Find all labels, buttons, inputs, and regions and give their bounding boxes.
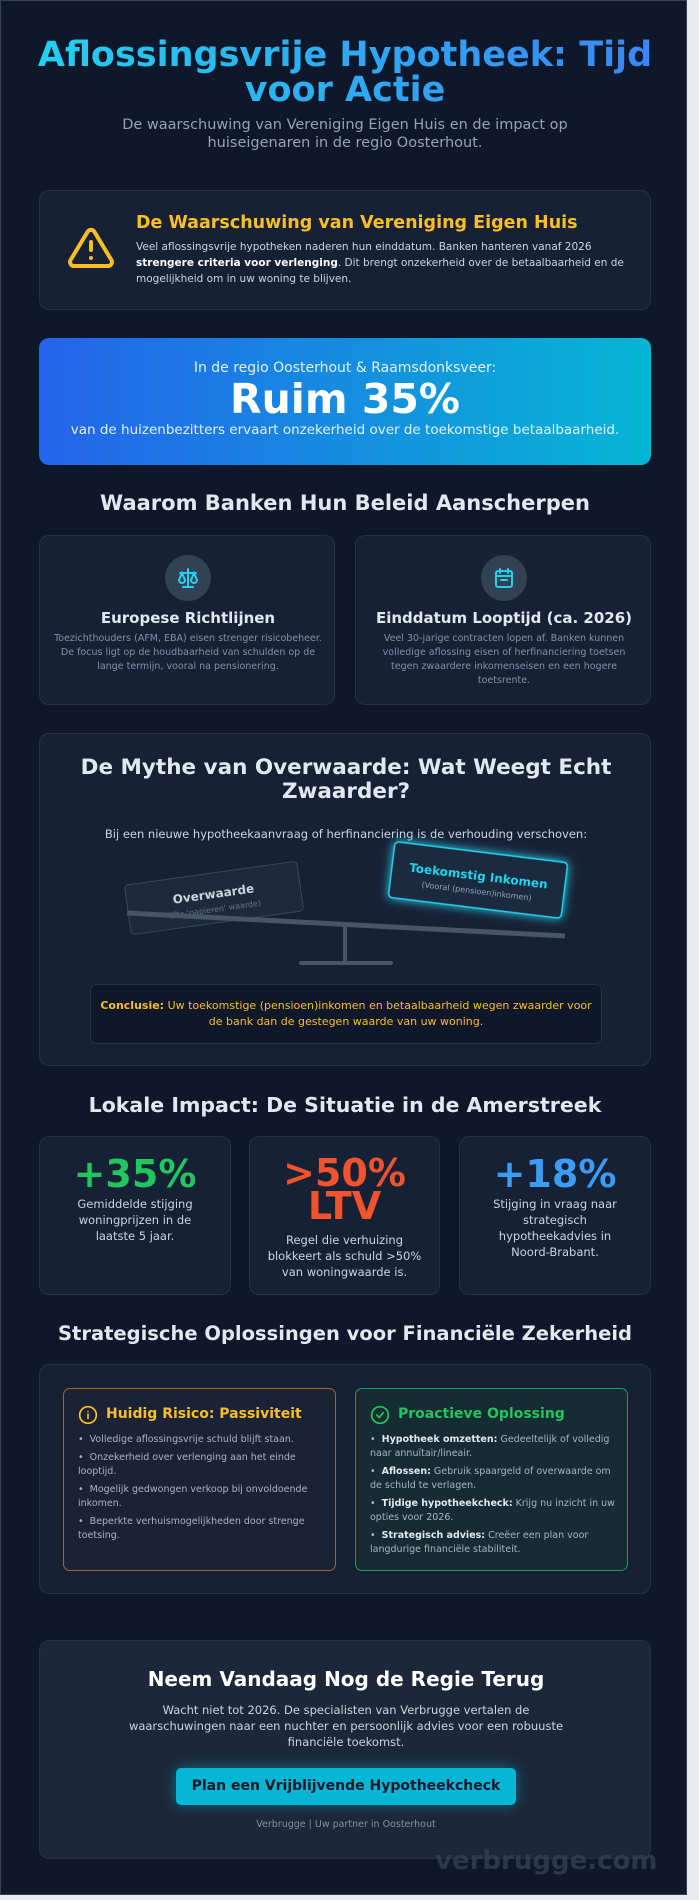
- stat: +35%: [39, 1136, 231, 1295]
- heading: strategische oplossingen: Strategische Oplossingen voor Financiële Zekerheid: [58, 1322, 632, 1345]
- box: huidig risico: • Volledige aflossingsvrije schuld blijft staan.: [78, 1434, 294, 1445]
- banner: 35% stat: [39, 338, 651, 465]
- panel: mythe van overwaarde: [39, 733, 651, 1066]
- icon: warning triangle: [68, 228, 114, 268]
- stat: +18%: Stijging in vraag naar strategisch hypotheekadvies in Noord-Brabant.: [493, 1197, 617, 1259]
- card: einddatum looptijd: Veel 30-jarige contracten lopen af. Banken kunnen volledige aflossing eisen of herfinanciering toetsen tegen zwaardere inkomenseisen en een hogere toetsrente.: [383, 633, 625, 686]
- callout: conclusie: [90, 984, 602, 1044]
- title: Aflossingsvrije Hypotheek: Tijd voor Actie: [38, 35, 652, 110]
- mythe heading: De Mythe van Overwaarde: Wat Weegt Echt Zwaarder?: [81, 755, 611, 804]
- box: proactieve oplossing: • Aflossen: Gebruik spaargeld of overwaarde om de schuld te verlagen.: [370, 1466, 611, 1491]
- warning text: Veel aflossingsvrije hypotheken naderen hun einddatum. Banken hanteren vanaf 2026 strengere criteria voor verlenging. Dit brengt onzekerheid over de betaalbaarheid en de mogelijkheid om in uw woning te blijven.: [136, 241, 624, 285]
- scale diagram: [124, 834, 576, 965]
- banner: 35% stat: Ruim 35%: [230, 375, 460, 423]
- stat: +18%: +18%: [494, 1152, 616, 1196]
- stat: >50% LTV: [249, 1136, 440, 1295]
- panel: call to action: [39, 1640, 651, 1859]
- heading: waarom banken: Waarom Banken Hun Beleid Aanscherpen: [100, 491, 590, 515]
- stat: +35%: +35%: [74, 1152, 196, 1196]
- subtitle: De waarschuwing van Vereniging Eigen Huis en de impact op huiseigenaren in de regio Oosterhout.: [122, 117, 568, 151]
- box: huidig risico: [63, 1388, 336, 1571]
- icon: calendar: [481, 555, 527, 601]
- icon: scales: [165, 555, 211, 601]
- beam: [127, 913, 565, 936]
- card: einddatum looptijd: Einddatum Looptijd (ca. 2026): [376, 609, 632, 627]
- watermark: verbrugge.com: [435, 1846, 657, 1876]
- mythe intro: Bij een nieuwe hypotheekaanvraag of herfinanciering is de verhouding verschoven:: [105, 827, 587, 841]
- button: Plan een Vrijblijvende Hypotheekcheck: [192, 1778, 500, 1794]
- card: einddatum looptijd: [355, 535, 651, 705]
- callout: conclusie: Conclusie: Uw toekomstige (pensioen)inkomen en betaalbaarheid wegen zwaarder voor de bank dan de gestegen waarde van uw woning.: [100, 999, 592, 1028]
- panel: warning: [39, 190, 651, 310]
- button: [176, 1768, 516, 1805]
- box: huidig risico: • Mogelijk gedwongen verkoop bij onvoldoende inkomen.: [78, 1484, 307, 1509]
- box: huidig risico: Huidig Risico: Passiviteit: [106, 1406, 302, 1422]
- panel: call to action: Neem Vandaag Nog de Regie Terug: [148, 1667, 544, 1691]
- icon: check: [370, 1406, 390, 1424]
- box: toekomstig inkomen: Toekomstig Inkomen: [409, 861, 548, 891]
- stat: +18%: [459, 1136, 651, 1295]
- panel: call to action: Verbrugge | Uw partner in Oosterhout: [256, 1819, 436, 1830]
- box: proactieve oplossing: • Strategisch advies: Creëer een plan voor langdurige financiële stabiliteit.: [370, 1530, 588, 1555]
- box: proactieve oplossing: Proactieve Oplossing: [398, 1406, 565, 1422]
- card: europese richtlijnen: Europese Richtlijnen: [101, 609, 275, 627]
- stat: >50% LTV: LTV: [308, 1184, 381, 1228]
- warning heading: De Waarschuwing van Vereniging Eigen Huis: [136, 213, 578, 233]
- box: overwaarde: [124, 861, 304, 935]
- banner: 35% stat: van de huizenbezitters ervaart onzekerheid over de toekomstige betaalbaarheid.: [71, 422, 619, 438]
- box: proactieve oplossing: • Hypotheek omzetten: Gedeeltelijk of volledig naar annuïtair/lineair.: [370, 1434, 609, 1459]
- panel: oplossingen: [39, 1364, 651, 1594]
- box: proactieve oplossing: [355, 1388, 628, 1571]
- stat: >50% LTV: >50%: [283, 1151, 406, 1195]
- stat: +35%: Gemiddelde stijging woningprijzen in de laatste 5 jaar.: [77, 1197, 193, 1243]
- box: toekomstig inkomen: [388, 842, 568, 918]
- stat: >50% LTV: Regel die verhuizing blokkeert als schuld >50% van woningwaarde is.: [268, 1233, 421, 1279]
- card: europese richtlijnen: Toezichthouders (AFM, EBA) eisen strenger risicobeheer. De focus ligt op de houdbaarheid van schulden op de lange termijn, vooral na pensionering.: [54, 633, 322, 672]
- icon: info: [78, 1406, 98, 1424]
- banner: 35% stat: In de regio Oosterhout & Raamsdonksveer:: [194, 360, 496, 376]
- card: europese richtlijnen: [39, 535, 335, 705]
- box: proactieve oplossing: • Tijdige hypotheekcheck: Krijg nu inzicht in uw opties voor 2026.: [370, 1498, 615, 1523]
- box: huidig risico: • Onzekerheid over verlenging aan het einde looptijd.: [78, 1452, 296, 1477]
- heading: lokale impact: Lokale Impact: De Situatie in de Amerstreek: [89, 1093, 601, 1117]
- box: overwaarde: (De 'papieren' waarde): [170, 899, 262, 920]
- box: toekomstig inkomen: (Vooral (pensioen)inkomen): [421, 880, 532, 903]
- box: huidig risico: • Beperkte verhuismogelijkheden door strenge toetsing.: [78, 1516, 305, 1541]
- box: overwaarde: Overwaarde: [172, 881, 255, 907]
- panel: call to action: Wacht niet tot 2026. De specialisten van Verbrugge vertalen de waarschuwingen naar een nuchter en persoonlijk advies voor een robuuste financiële toekomst.: [129, 1703, 563, 1749]
